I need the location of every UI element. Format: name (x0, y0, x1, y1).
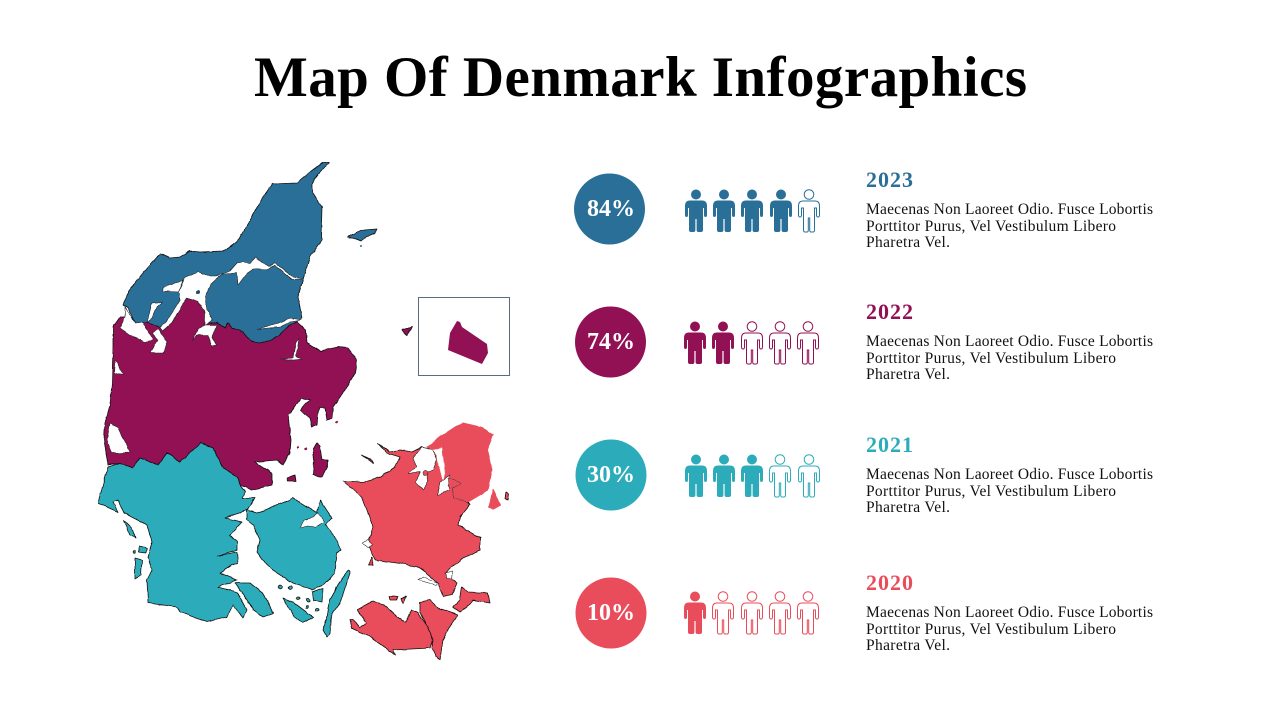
row 2021 (576, 432, 1153, 516)
title: Map Of Denmark Infographics (254, 46, 1027, 109)
region: mid Jutland (purple) (104, 298, 412, 490)
region: Zealand and islands (coral) (343, 423, 509, 660)
percentage 74% (575, 306, 646, 378)
row 2022 (575, 299, 1153, 383)
description 2022: Pharetra Vel. (866, 366, 950, 383)
description 2022: Porttitor Purus, Vel Vestibulum Libero (866, 350, 1116, 367)
year 2023: 2023 (866, 167, 913, 192)
description 2021: Porttitor Purus, Vel Vestibulum Libero (866, 483, 1116, 500)
region: south Jutland and Funen (teal) (98, 443, 350, 637)
description 2022 (866, 333, 1153, 383)
percentage 74%: 74% (587, 329, 635, 355)
year 2022: 2022 (866, 299, 913, 324)
percentage 30% (576, 440, 646, 510)
description 2022: Maecenas Non Laoreet Odio. Fusce Lobortis (866, 333, 1153, 350)
people icons 2020 (684, 592, 818, 634)
map of Denmark (98, 162, 509, 660)
percentage 84%: 84% (587, 196, 635, 222)
percentage 30%: 30% (587, 462, 635, 488)
description 2023: Pharetra Vel. (866, 234, 950, 251)
percentage 10%: 10% (587, 600, 635, 626)
fjords and inland water (107, 257, 470, 585)
people icons 2022 (684, 322, 818, 364)
row 2023 (574, 167, 1153, 251)
description 2021: Maecenas Non Laoreet Odio. Fusce Lobortis (866, 466, 1153, 483)
description 2023: Porttitor Purus, Vel Vestibulum Libero (866, 218, 1116, 235)
percentage 10% (576, 578, 646, 648)
people icons 2023 (685, 190, 820, 232)
description 2023: Maecenas Non Laoreet Odio. Fusce Lobortis (866, 201, 1153, 218)
description 2020: Pharetra Vel. (866, 637, 950, 654)
region: north Jutland (blue) (123, 162, 377, 344)
year 2021: 2021 (866, 432, 913, 457)
people icons 2021 (685, 454, 820, 497)
percentage 84% (574, 174, 645, 244)
row 2020 (576, 570, 1153, 654)
description 2020: Maecenas Non Laoreet Odio. Fusce Lobortis (866, 604, 1153, 621)
year 2020: 2020 (866, 570, 913, 595)
description 2023 (866, 201, 1153, 251)
inset box: Bornholm (418, 298, 510, 376)
description 2020 (866, 604, 1153, 654)
description 2021 (866, 466, 1153, 516)
description 2021: Pharetra Vel. (866, 499, 950, 516)
description 2020: Porttitor Purus, Vel Vestibulum Libero (866, 621, 1116, 638)
